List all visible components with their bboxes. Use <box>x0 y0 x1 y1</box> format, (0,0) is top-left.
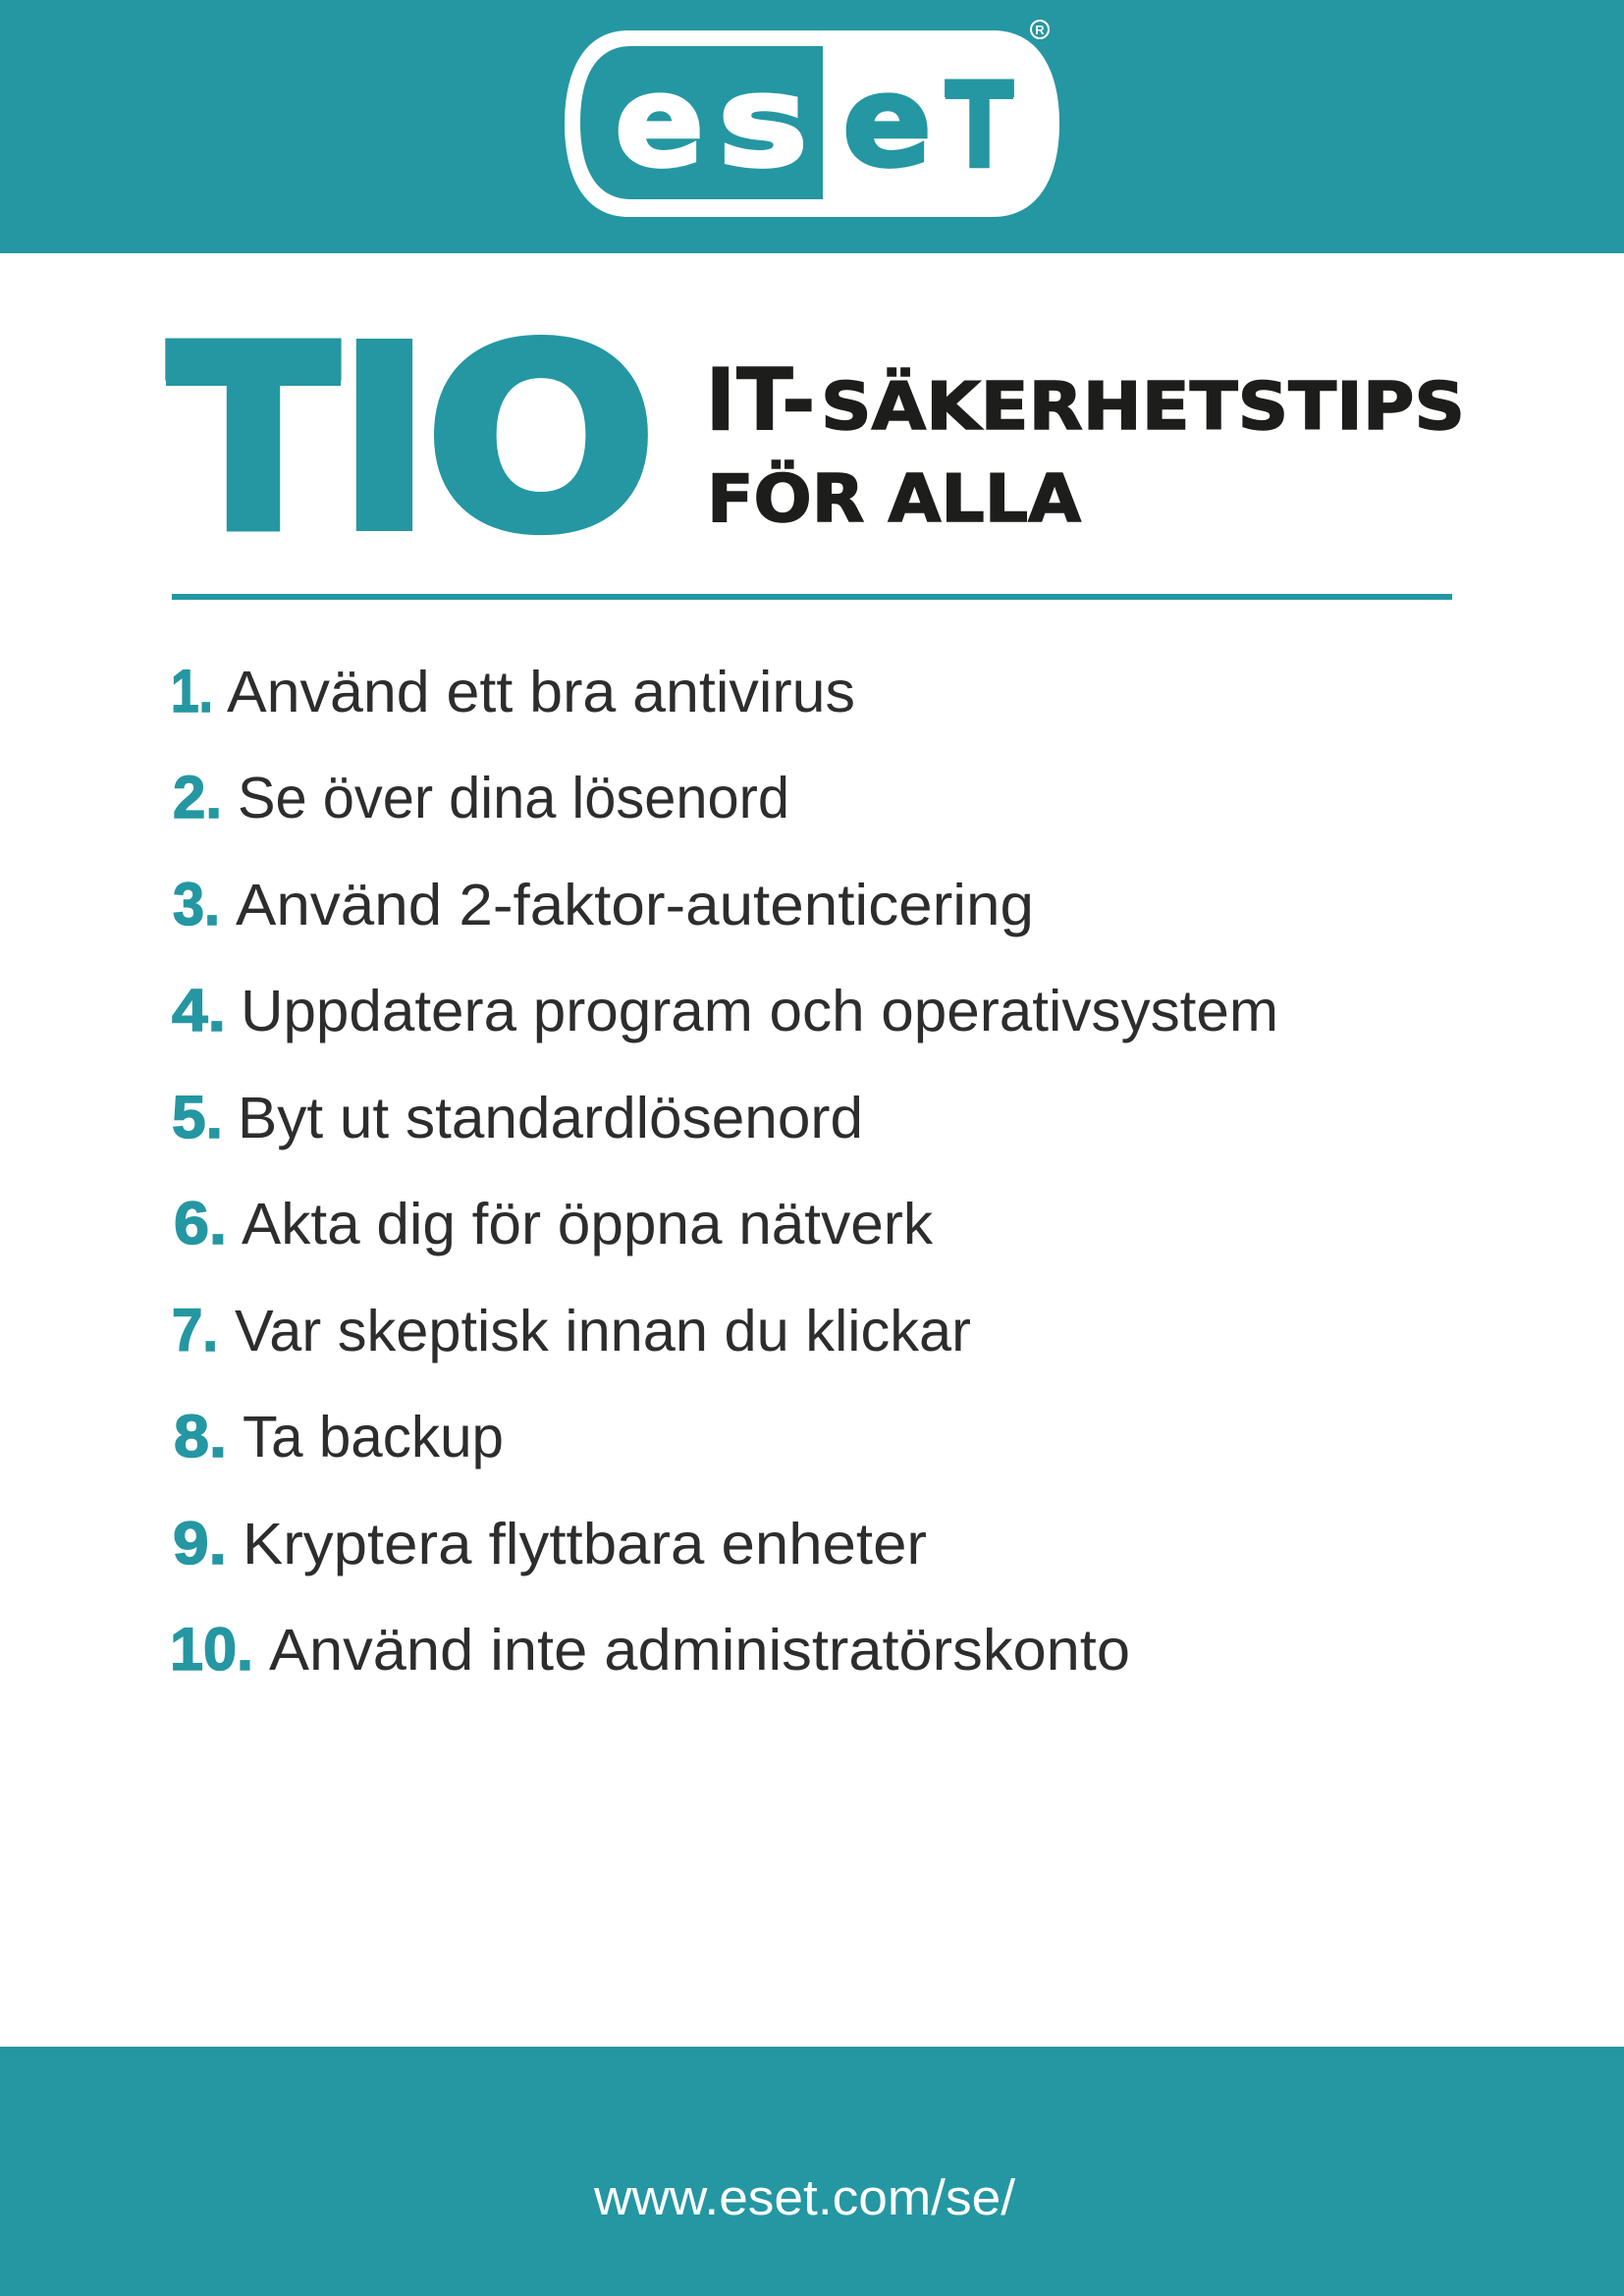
tip 1: Använd ett bra antivirus <box>227 660 855 724</box>
tip 6: 6. <box>174 1190 227 1256</box>
subtitle: SÄKERHETSTIPS <box>821 367 1465 445</box>
tip 1: 1. <box>171 658 213 724</box>
subtitle <box>705 349 1465 537</box>
tip 7: Var skeptisk innan du klickar <box>235 1299 971 1363</box>
ESET logo: e <box>842 49 932 195</box>
tip 8: Ta backup <box>243 1405 504 1469</box>
subtitle: IT- <box>705 349 816 451</box>
footer band <box>0 2047 1624 2296</box>
ESET logo: s <box>718 49 808 195</box>
tip 2: Se över dina lösenord <box>238 766 789 830</box>
tip 5: 5. <box>172 1084 223 1150</box>
tip 9: Kryptera flyttbara enheter <box>243 1512 927 1576</box>
tip 4: 4. <box>172 977 226 1043</box>
ESET logo: T <box>945 57 1014 197</box>
title TIO: T <box>167 291 341 589</box>
tip 3: 3. <box>173 871 220 937</box>
tip 4: Uppdatera program och operativsystem <box>241 979 1278 1043</box>
ESET logo: R <box>1035 23 1045 37</box>
ESET logo <box>565 21 1059 217</box>
title TIO: O <box>425 293 657 587</box>
tip 10: Använd inte administratörskonto <box>269 1618 1130 1682</box>
tip 2: 2. <box>173 764 222 830</box>
tip 8: 8. <box>174 1403 227 1469</box>
footer url: www.eset.com/se/ <box>593 2169 1016 2225</box>
title TIO <box>166 291 657 589</box>
tip 10: 10. <box>170 1616 253 1682</box>
tip 6: Akta dig för öppna nätverk <box>242 1192 934 1256</box>
ESET logo: e <box>615 49 704 195</box>
tip 5: Byt ut standardlösenord <box>238 1086 863 1150</box>
divider rule <box>172 594 1452 600</box>
tips list <box>170 658 1278 1682</box>
subtitle: FÖR ALLA <box>707 459 1081 537</box>
tip 3: Använd 2-faktor-autenticering <box>236 873 1034 937</box>
tip 7: 7. <box>172 1297 218 1363</box>
tip 9: 9. <box>173 1510 227 1576</box>
header band <box>0 0 1624 253</box>
title TIO: I <box>334 291 435 589</box>
